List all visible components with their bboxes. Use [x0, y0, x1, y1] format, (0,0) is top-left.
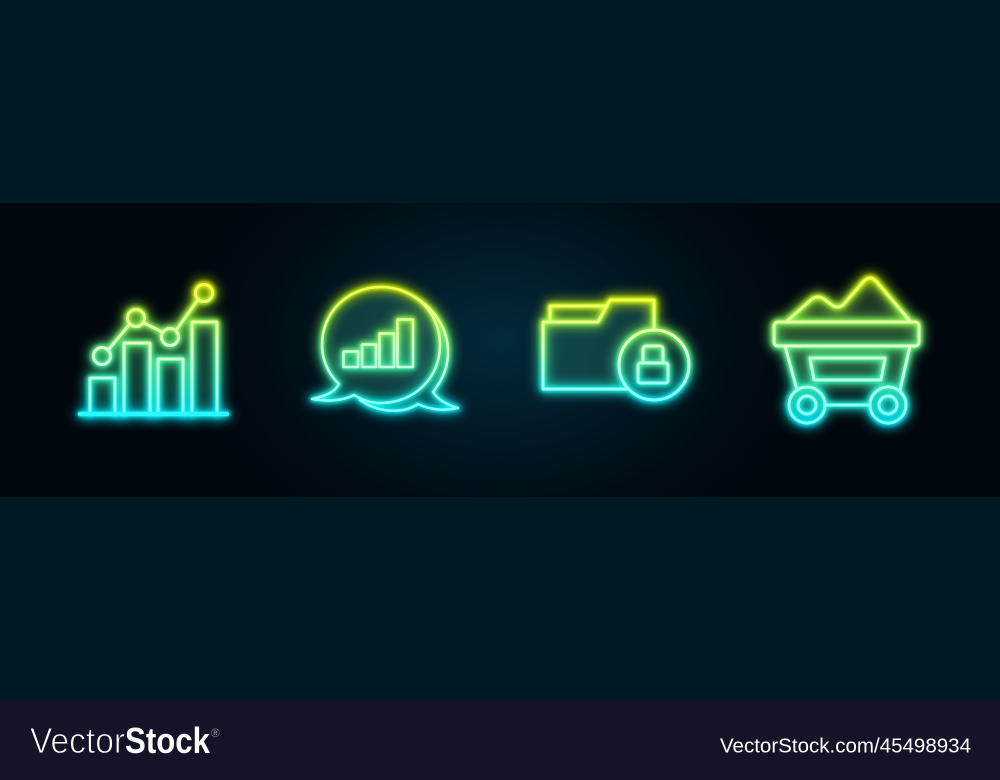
logo: VectorStock: Vector: [30, 720, 125, 761]
chart outlines: [90, 284, 217, 414]
cart outlines and wheels: [774, 278, 919, 423]
image id caption: VectorStock.com/45498934: [720, 736, 971, 758]
icon: folder with padlock: [543, 300, 689, 400]
logo: VectorStock: [30, 720, 220, 761]
dark center band: [0, 203, 1000, 497]
footer bar: [0, 700, 1000, 780]
icon: speech bubbles with signal bars: [312, 287, 458, 411]
icon: bar chart with trend line: [80, 284, 227, 414]
chart baseline: [80, 412, 227, 416]
logo: VectorStock: ®: [211, 726, 220, 740]
folder and lock outlines: [543, 300, 689, 400]
bubble outlines and signal bars: [312, 287, 458, 411]
logo: VectorStock: Stock: [125, 720, 211, 761]
icon: mine cart with ore: [774, 278, 919, 423]
